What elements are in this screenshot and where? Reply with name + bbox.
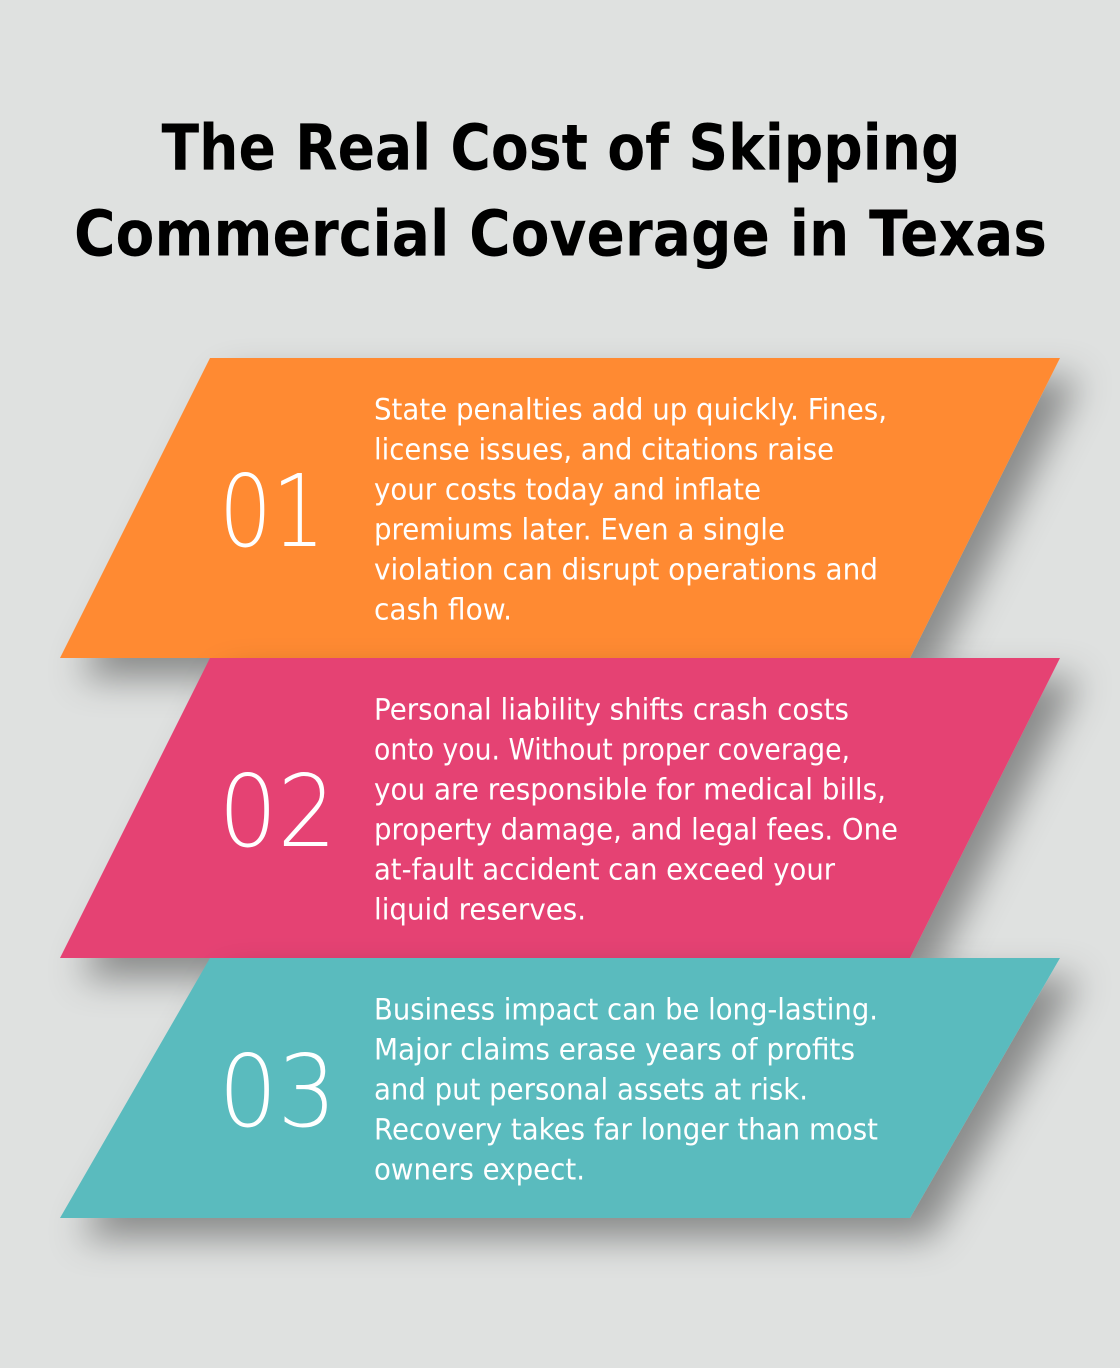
title xyxy=(74,112,1047,270)
text: personal liability xyxy=(374,692,898,926)
text: business impact: and put personal assets at risk. xyxy=(374,1072,808,1106)
text: state penalties: violation can disrupt operations and xyxy=(374,552,878,586)
number 02: 02 xyxy=(218,753,336,870)
text: state penalties: cash flow. xyxy=(374,592,512,626)
text: business impact xyxy=(374,992,878,1186)
text: business impact: Business impact can be long-lasting. xyxy=(374,992,878,1026)
number 03: 03 xyxy=(218,1033,336,1150)
panel: step 03 xyxy=(60,958,1060,1218)
pink parallelogram xyxy=(60,658,1060,958)
text: state penalties: State penalties add up quickly. Fines, xyxy=(374,392,887,426)
panel: step 01 xyxy=(60,358,1060,658)
text: personal liability: you are responsible for medical bills, xyxy=(374,772,886,806)
text: business impact: Recovery takes far longer than most xyxy=(374,1112,878,1146)
panel: step 02 xyxy=(60,658,1060,958)
title: The Real Cost of Skipping xyxy=(162,112,960,184)
text: state penalties: your costs today and inflate xyxy=(374,472,761,506)
text: personal liability: property damage, and legal fees. One xyxy=(374,812,898,846)
text: personal liability: Personal liability shifts crash costs xyxy=(374,692,849,726)
text: state penalties xyxy=(374,392,887,626)
text: state penalties: license issues, and citations raise xyxy=(374,432,834,466)
text: business impact: Major claims erase years of profits xyxy=(374,1032,855,1066)
text: personal liability: liquid reserves. xyxy=(374,892,586,926)
teal parallelogram xyxy=(60,958,1060,1218)
number 01: 01 xyxy=(219,453,325,570)
text: state penalties: premiums later. Even a single xyxy=(374,512,785,546)
text: personal liability: onto you. Without proper coverage, xyxy=(374,732,850,766)
text: personal liability: at-fault accident can exceed your xyxy=(374,852,836,886)
orange parallelogram xyxy=(60,358,1060,658)
text: business impact: owners expect. xyxy=(374,1152,585,1186)
